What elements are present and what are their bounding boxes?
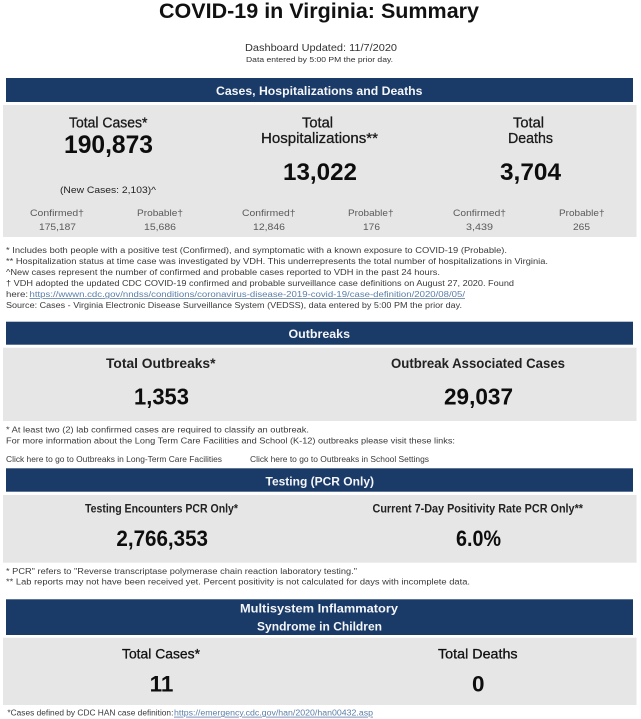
breakdown: hospitalizations probable bbox=[348, 208, 394, 233]
metric: total outbreaks: Total Outbreaks* bbox=[106, 355, 216, 371]
banner: multisystem inflammatory syndrome: Syndrome in Children bbox=[257, 620, 382, 634]
footnotes: testing: * PCR" refers to "Reverse transcriptase polymerase chain reaction laboratory testing." bbox=[6, 567, 357, 576]
breakdown: deaths confirmed bbox=[453, 208, 506, 233]
footnote: case definition: *Cases defined by CDC HAN case definition: bbox=[7, 709, 173, 718]
metric: positivity rate: 6.0% bbox=[456, 526, 501, 551]
footnotes: testing: ** Lab reports may not have been received yet. Percent positivity is not calculated for days with incomplete data. bbox=[6, 578, 470, 587]
banner: outbreaks bbox=[6, 322, 633, 345]
metric: syndrome total cases: Total Cases* bbox=[122, 646, 201, 662]
banner: multisystem inflammatory syndrome: Multisystem Inflammatory bbox=[240, 602, 398, 616]
breakdown: deaths probable bbox=[559, 208, 604, 233]
metric: syndrome total deaths: Total Deaths bbox=[438, 646, 518, 662]
metric: syndrome total cases: 11 bbox=[150, 672, 173, 697]
metric: syndrome total cases bbox=[122, 646, 201, 697]
footnotes: cases: here: bbox=[6, 290, 28, 299]
metric: positivity rate: Current 7-Day Positivity Rate PCR Only** bbox=[372, 504, 583, 516]
footnotes: cases: † VDH adopted the updated CDC COVID-19 confirmed and probable surveillance case definitions on August 27, 2020. Found bbox=[6, 279, 514, 288]
breakdown: cases probable bbox=[137, 208, 183, 233]
dashboard updated date bbox=[245, 43, 397, 64]
breakdown: hospitalizations probable: Probable† bbox=[348, 208, 394, 219]
breakdown: deaths probable: 265 bbox=[573, 222, 590, 233]
metric: testing encounters bbox=[85, 504, 238, 551]
breakdown: cases confirmed: 175,187 bbox=[39, 222, 76, 233]
metric: total cases: Total Cases* bbox=[69, 114, 148, 132]
metric: total cases: (New Cases: 2,103)^ bbox=[60, 185, 157, 196]
metric: total cases bbox=[60, 114, 157, 196]
panel: syndrome metrics bbox=[3, 638, 636, 705]
footnotes: outbreaks: For more information about the Long Term Care Facilities and School (K-12) outbreaks please visit these links: bbox=[6, 437, 455, 446]
link: school outbreaks: Click here to go to Outbreaks in School Settings bbox=[250, 455, 429, 464]
section: testing bbox=[3, 468, 636, 587]
metric: outbreak associated cases: Outbreak Associated Cases bbox=[391, 355, 565, 371]
metric: total deaths bbox=[500, 114, 561, 186]
breakdown: cases confirmed bbox=[30, 208, 84, 233]
panel: cases metrics bbox=[3, 105, 636, 237]
metric: outbreak associated cases: 29,037 bbox=[444, 384, 513, 410]
breakdown: hospitalizations confirmed bbox=[242, 208, 296, 233]
breakdown: deaths confirmed: 3,439 bbox=[466, 222, 493, 233]
metric: syndrome total deaths bbox=[438, 646, 518, 697]
panel: testing metrics bbox=[3, 495, 636, 563]
footnotes: outbreaks bbox=[6, 426, 455, 446]
footnote: case definition bbox=[7, 709, 374, 718]
metric: total hospitalizations: Total bbox=[302, 114, 333, 132]
footnotes: cases: Source: Cases - Virginia Electronic Disease Surveillance System (VEDSS), data entered by 5:00 PM the prior day. bbox=[6, 301, 462, 310]
section: outbreaks bbox=[3, 322, 636, 464]
footnotes: cases: * Includes both people with a positive test (Confirmed), and symptomatic with a known exposure to COVID-19 (Probable). bbox=[6, 246, 507, 255]
section: cases, hospitalizations and deaths bbox=[3, 78, 636, 310]
section: multisystem inflammatory syndrome bbox=[3, 599, 636, 718]
banner: cases bbox=[6, 78, 633, 102]
banner: testing bbox=[6, 468, 633, 492]
metric: total hospitalizations bbox=[261, 114, 378, 186]
breakdown: hospitalizations confirmed: Confirmed† bbox=[242, 208, 296, 219]
banner: multisystem inflammatory syndrome bbox=[6, 599, 633, 635]
dashboard updated date: Dashboard Updated: 11/7/2020 bbox=[245, 43, 397, 54]
footnote: case definition: https://emergency.cdc.gov/han/2020/han00432.asp bbox=[174, 709, 374, 718]
metric: total deaths: Deaths bbox=[508, 130, 553, 147]
dashboard updated date: Data entered by 5:00 PM the prior day. bbox=[246, 55, 393, 64]
banner: cases: Cases, Hospitalizations and Deaths bbox=[216, 84, 423, 98]
breakdown: deaths probable: Probable† bbox=[559, 208, 604, 219]
banner: testing: Testing (PCR Only) bbox=[266, 475, 374, 489]
metric: positivity rate bbox=[372, 504, 583, 551]
metric: testing encounters: 2,766,353 bbox=[116, 526, 208, 551]
footnotes: cases: ** Hospitalization status at time case was investigated by VDH. This underrepresents the total number of hospitalizations in Virginia. bbox=[6, 257, 548, 266]
metric: outbreak associated cases bbox=[391, 355, 565, 410]
panel: outbreak metrics bbox=[3, 348, 636, 421]
breakdown: deaths confirmed: Confirmed† bbox=[453, 208, 506, 219]
metric: total outbreaks: 1,353 bbox=[134, 384, 189, 410]
footnotes: cases: https://wwwn.cdc.gov/nndss/conditions/coronavirus-disease-2019-covid-19/case-definition/2020/08/05/ bbox=[30, 290, 466, 299]
metric: testing encounters: Testing Encounters PCR Only* bbox=[85, 504, 238, 516]
metric: total outbreaks bbox=[106, 355, 216, 410]
metric: total deaths: 3,704 bbox=[500, 159, 561, 186]
breakdown: hospitalizations confirmed: 12,846 bbox=[253, 222, 285, 233]
breakdown: cases confirmed: Confirmed† bbox=[30, 208, 84, 219]
footnotes: outbreaks: * At least two (2) lab confirmed cases are required to classify an outbreak. bbox=[6, 426, 309, 435]
footnotes: cases bbox=[6, 246, 548, 310]
metric: total hospitalizations: Hospitalizations** bbox=[261, 130, 378, 147]
footnotes: cases: ^New cases represent the number of confirmed and probable cases reported to VDH in the past 24 hours. bbox=[6, 268, 440, 277]
banner: outbreaks: Outbreaks bbox=[288, 327, 350, 341]
breakdown: cases probable: Probable† bbox=[137, 208, 183, 219]
metric: total deaths: Total bbox=[513, 114, 544, 132]
link: long-term care outbreaks: Click here to go to Outbreaks in Long-Term Care Facilities bbox=[6, 455, 222, 464]
footnotes: testing bbox=[6, 567, 470, 587]
metric: syndrome total deaths: 0 bbox=[472, 672, 484, 697]
metric: total hospitalizations: 13,022 bbox=[283, 159, 357, 186]
metric: total cases: 190,873 bbox=[64, 131, 153, 159]
breakdown: hospitalizations probable: 176 bbox=[363, 222, 380, 233]
breakdown: cases probable: 15,686 bbox=[144, 222, 176, 233]
